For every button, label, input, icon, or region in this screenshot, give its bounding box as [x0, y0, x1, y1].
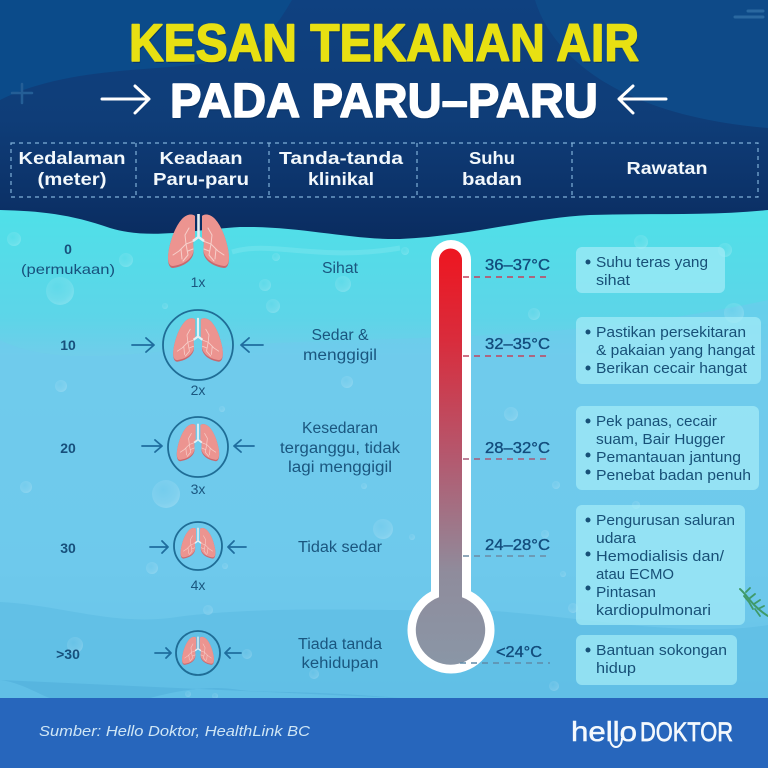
treatment 3: suam, Bair Hugger	[596, 431, 725, 448]
title	[129, 14, 640, 130]
depth over 30: >30	[56, 646, 80, 662]
water wave band bottom	[0, 680, 400, 698]
sign: impaired consciousness: lagi menggigil	[288, 459, 392, 476]
title line 1: KESAN TEKANAN AIR	[129, 14, 639, 73]
treatment 5: hidup	[596, 660, 636, 677]
thermometer	[408, 240, 494, 674]
treatment 1	[576, 247, 725, 293]
temp under 24: <24°C	[496, 644, 542, 661]
water background	[0, 210, 768, 698]
temperature labels	[460, 257, 550, 663]
title line 2: PADA PARU–PARU	[170, 75, 598, 128]
sign: no signs of life: Tiada tanda	[298, 636, 382, 653]
treatment 4	[576, 505, 745, 625]
header: treatment: Rawatan	[626, 158, 708, 178]
treatment 4: atau ECMO	[596, 566, 674, 583]
temp 36-37	[463, 257, 550, 277]
depth 20: 20	[60, 440, 76, 456]
temp 28-32: 28–32°C	[485, 440, 550, 457]
lungs 2x	[132, 310, 263, 398]
clinical signs column	[280, 260, 400, 672]
sign: shivering: Sedar &	[312, 327, 369, 344]
lungs 1x	[168, 214, 229, 290]
temp 32-35: 32–35°C	[485, 336, 550, 353]
treatment 3: Pemantauan jantung	[596, 449, 741, 466]
lungs 3x	[142, 417, 254, 497]
header: lung state	[153, 148, 249, 189]
lungs 4x: 4x	[191, 577, 205, 593]
temp 28-32	[463, 440, 550, 459]
decorative plus icon	[12, 84, 32, 103]
header: body temperature: badan	[462, 169, 522, 189]
header: clinical signs: klinikal	[308, 169, 374, 189]
table header	[11, 143, 758, 197]
bubbles	[7, 232, 744, 699]
temp under 24	[460, 644, 550, 663]
treatment 4: Pengurusan saluran	[596, 512, 735, 529]
treatment 4: Hemodialisis dan/	[596, 548, 725, 565]
depth 0: (permukaan)	[21, 261, 115, 277]
treatment 3: Penebat badan penuh	[596, 467, 751, 484]
depth 0: 0	[64, 241, 72, 257]
treatment 2: Pastikan persekitaran	[596, 324, 746, 341]
header: lung state: Paru-paru	[153, 169, 249, 189]
logo: hello doktor	[571, 716, 733, 747]
background shape top right	[535, 0, 768, 128]
logo: hello doktor: hello	[571, 716, 637, 747]
background shape top left	[0, 0, 292, 100]
treatment 4: udara	[596, 530, 637, 547]
sign: no signs of life: kehidupan	[302, 655, 378, 672]
treatment 3	[576, 406, 759, 490]
lungs column	[132, 214, 263, 675]
title line 2: PADA PARU–PARU	[171, 77, 599, 130]
logo: hello doktor: DOKTOR	[640, 717, 733, 747]
row: depth labels	[21, 241, 115, 662]
lungs 2x: 2x	[191, 382, 205, 398]
treatment 1: sihat	[596, 272, 631, 289]
title line 1: KESAN TEKANAN AIR	[130, 16, 640, 75]
dark navy background	[0, 0, 768, 240]
thermometer glass	[408, 240, 494, 674]
treatment 2	[576, 317, 761, 384]
treatment boxes	[576, 247, 761, 685]
depth 30: 30	[60, 540, 76, 556]
sign: shivering: menggigil	[303, 347, 377, 364]
water wave band upper	[0, 300, 768, 698]
header: depth	[18, 148, 126, 189]
temp 36-37: 36–37°C	[485, 257, 550, 274]
sign: healthy: Sihat	[322, 260, 359, 277]
thermometer mercury	[416, 248, 485, 665]
depth 0	[21, 241, 115, 277]
footer bar	[0, 698, 768, 768]
icon: seaweed	[740, 588, 768, 616]
treatment 4: kardiopulmonari	[596, 602, 711, 619]
header: depth: Kedalaman	[18, 148, 126, 168]
treatment 5	[576, 635, 737, 685]
temp 24-28: 24–28°C	[485, 537, 550, 554]
depth 10: 10	[60, 337, 76, 353]
sign: impaired consciousness: Kesedaran	[302, 420, 378, 437]
sign: no signs of life	[298, 636, 382, 672]
treatment 1: Suhu teras yang	[596, 254, 708, 271]
treatment 4: Pintasan	[596, 584, 656, 601]
header dashed frame	[11, 143, 758, 197]
temp 24-28	[463, 537, 550, 556]
lungs 3x: 3x	[191, 481, 205, 497]
treatment 2: & pakaian yang hangat	[596, 342, 756, 359]
lungs over 4x	[155, 631, 241, 675]
lungs 1x: 1x	[191, 274, 205, 290]
header: clinical signs	[279, 148, 403, 189]
header: clinical signs: Tanda-tanda	[279, 148, 403, 168]
header: lung state: Keadaan	[160, 148, 242, 168]
decorative lines icon	[735, 11, 763, 17]
sign: unconscious: Tidak sedar	[298, 539, 382, 556]
highlight streak	[232, 248, 400, 253]
header: body temperature: Suhu	[469, 148, 515, 168]
water wave band lower	[0, 602, 768, 698]
sign: impaired consciousness: terganggu, tidak	[280, 440, 400, 457]
header: body temperature	[462, 148, 522, 189]
sign: impaired consciousness	[280, 420, 400, 476]
header: depth: (meter)	[38, 169, 106, 189]
lungs 4x	[150, 522, 246, 593]
temp 32-35	[463, 336, 550, 356]
arrow: title right	[619, 86, 666, 113]
source text: Sumber: Hello Doktor, HealthLink BC	[39, 723, 310, 740]
treatment 2: Berikan cecair hangat	[596, 360, 748, 377]
treatment 3: Pek panas, cecair	[596, 413, 717, 430]
arrow: title left	[102, 86, 149, 113]
treatment 5: Bantuan sokongan	[596, 642, 727, 659]
sign: shivering	[303, 327, 377, 364]
